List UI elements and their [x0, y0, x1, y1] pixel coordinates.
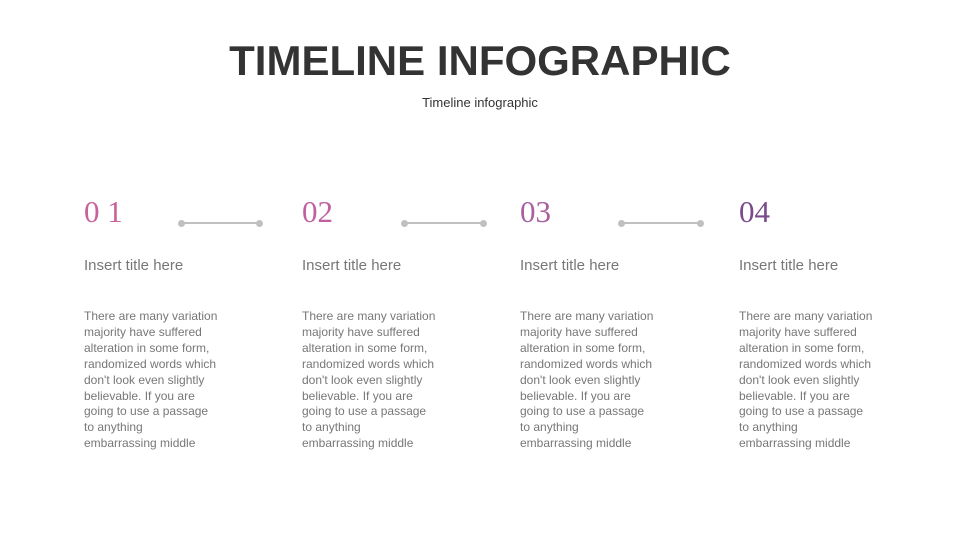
column 1: going to use a passage [84, 404, 208, 418]
connector 1 [181, 222, 260, 224]
connector 3 [621, 222, 701, 224]
column 1: to anything [84, 420, 143, 434]
column 2: majority have suffered [302, 325, 420, 339]
column 1: majority have suffered [84, 325, 202, 339]
column 2: randomized words which [302, 357, 434, 371]
column 3: believable. If you are [520, 389, 631, 403]
title: TIMELINE INFOGRAPHIC [229, 37, 731, 84]
column 4: Insert title here [739, 257, 838, 274]
column 4: don't look even slightly [739, 373, 859, 387]
column 2: to anything [302, 420, 361, 434]
column 1: alteration in some form, [84, 341, 209, 355]
column 1: don't look even slightly [84, 373, 204, 387]
column 4: believable. If you are [739, 389, 850, 403]
column 4: alteration in some form, [739, 341, 864, 355]
connector 2 [404, 222, 484, 224]
column 4 [739, 194, 872, 450]
column 2: Insert title here [302, 257, 401, 274]
column 2: embarrassing middle [302, 436, 413, 450]
column 4: 04 [739, 194, 770, 229]
column 3 [520, 194, 653, 450]
column 1: randomized words which [84, 357, 216, 371]
column 4: There are many variation [739, 309, 872, 323]
column 2: 02 [302, 194, 333, 229]
column 3: randomized words which [520, 357, 652, 371]
column 3: 03 [520, 194, 551, 229]
column 1: 0 1 [84, 194, 123, 229]
column 3: embarrassing middle [520, 436, 631, 450]
column 2: don't look even slightly [302, 373, 422, 387]
column 1: Insert title here [84, 257, 183, 274]
column 3: going to use a passage [520, 404, 644, 418]
column 4: randomized words which [739, 357, 871, 371]
column 4: majority have suffered [739, 325, 857, 339]
column 4: embarrassing middle [739, 436, 850, 450]
column 2: going to use a passage [302, 404, 426, 418]
column 2 [302, 194, 435, 450]
column 1: believable. If you are [84, 389, 195, 403]
column 2: believable. If you are [302, 389, 413, 403]
column 4: going to use a passage [739, 404, 863, 418]
column 1: embarrassing middle [84, 436, 195, 450]
column 1 [84, 194, 217, 450]
column 3: to anything [520, 420, 579, 434]
column 4: to anything [739, 420, 798, 434]
column 3: majority have suffered [520, 325, 638, 339]
subtitle: Timeline infographic [422, 95, 538, 110]
column 2: alteration in some form, [302, 341, 427, 355]
column 2: There are many variation [302, 309, 435, 323]
column 1: There are many variation [84, 309, 217, 323]
column 3: alteration in some form, [520, 341, 645, 355]
column 3: There are many variation [520, 309, 653, 323]
column 3: don't look even slightly [520, 373, 640, 387]
column 3: Insert title here [520, 257, 619, 274]
